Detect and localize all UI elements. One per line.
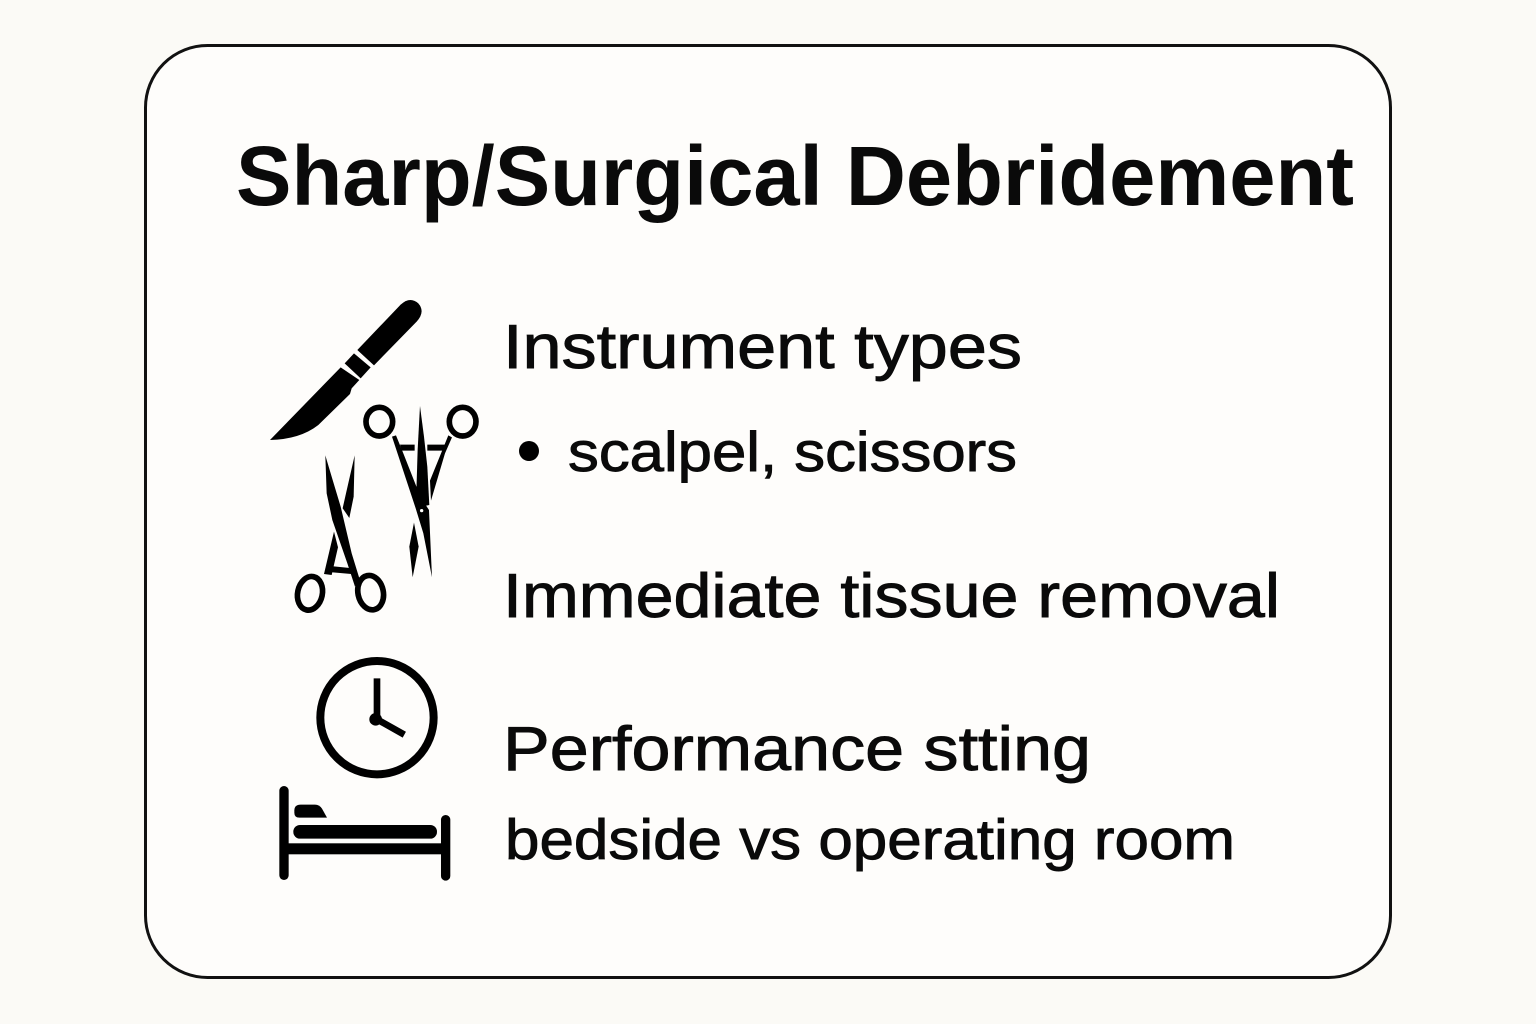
heading: performance setting: Performance stting — [503, 715, 1091, 784]
icon: lower scissors — [294, 455, 387, 612]
icon: scalpel — [270, 300, 422, 440]
title: Sharp/Surgical Debridement — [236, 129, 1354, 223]
heading: instrument types: Instrument types — [503, 313, 1022, 382]
bullet — [519, 441, 539, 461]
text: scalpel, scissors: scalpel, scissors — [568, 420, 1017, 483]
icon: clock — [320, 661, 434, 774]
icon: bed — [279, 786, 450, 881]
heading: immediate tissue removal: Immediate tissue removal — [503, 562, 1280, 631]
text: bedside vs operating room: bedside vs operating room — [505, 808, 1235, 872]
panel: main card — [146, 46, 1390, 978]
icon: upright scissors — [366, 406, 476, 577]
